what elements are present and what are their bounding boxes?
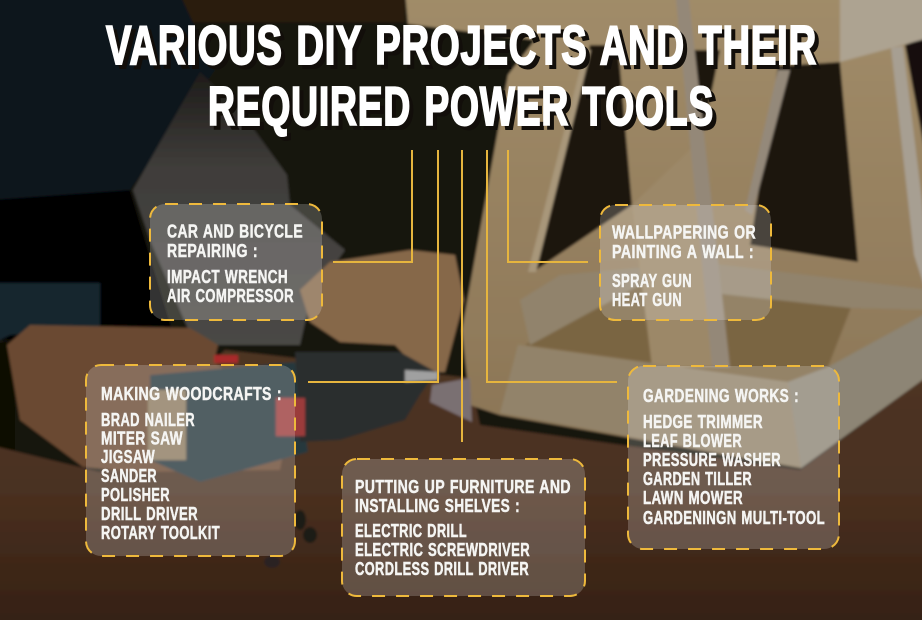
title (106, 14, 817, 137)
panel: making woodcrafts: DRILL DRIVER (101, 504, 198, 524)
panel: car and bicycle repairing: IMPACT WRENCH (167, 267, 288, 287)
panel: car and bicycle repairing: REPAIRING : (167, 241, 258, 261)
panel: making woodcrafts: JIGSAW (101, 447, 155, 467)
panel: making woodcrafts (86, 365, 295, 556)
connector: wallpapering or painting (508, 150, 588, 262)
panel: gardening works: GARDENING WORKS : (643, 386, 799, 406)
panel: making woodcrafts: ROTARY TOOLKIT (101, 523, 220, 543)
connector: car and bicycle repairing (333, 150, 412, 262)
connector: gardening works (487, 150, 617, 382)
panel: putting up furniture and installing shelves (342, 459, 585, 596)
connector: making woodcrafts (308, 150, 438, 382)
connector: putting up furniture (461, 150, 463, 442)
panel: making woodcrafts: SANDER (101, 466, 157, 486)
panel: gardening works: LAWN MOWER (643, 488, 743, 508)
panel: gardening works (628, 366, 839, 549)
panel: making woodcrafts: POLISHER (101, 485, 170, 505)
panel: gardening works: GARDENINGN MULTI-TOOL (643, 508, 825, 528)
panel: gardening works: LEAF BLOWER (643, 431, 742, 451)
connector lines (308, 150, 617, 442)
panel: gardening works: PRESSURE WASHER (643, 450, 781, 470)
panel: putting up furniture and installing shelves: PUTTING UP FURNITURE AND (355, 477, 571, 497)
panel: putting up furniture and installing shelves: CORDLESS DRILL DRIVER (355, 559, 529, 579)
panel: gardening works: HEDGE TRIMMER (643, 412, 763, 432)
panel: wallpapering or painting a wall: WALLPAPERING OR (612, 222, 756, 242)
panel: putting up furniture and installing shelves: INSTALLING SHELVES : (355, 496, 520, 516)
panel: wallpapering or painting a wall: SPRAY GUN (612, 271, 692, 291)
panel: putting up furniture and installing shelves: ELECTRIC SCREWDRIVER (355, 540, 530, 560)
panel: making woodcrafts: BRAD NAILER (101, 410, 195, 430)
panel: wallpapering or painting a wall: HEAT GUN (612, 290, 682, 310)
panel: wallpapering or painting a wall (600, 205, 771, 320)
panel: making woodcrafts: MAKING WOODCRAFTS : (101, 384, 282, 404)
panel: gardening works: GARDEN TILLER (643, 469, 752, 489)
panel: putting up furniture and installing shelves: ELECTRIC DRILL (355, 521, 467, 541)
panel: car and bicycle repairing: CAR AND BICYCLE (167, 222, 303, 242)
panel: wallpapering or painting a wall: PAINTING A WALL : (612, 242, 754, 262)
panel: car and bicycle repairing: AIR COMPRESSOR (167, 286, 294, 306)
panel: car and bicycle repairing (150, 204, 322, 320)
panel: making woodcrafts: MITER SAW (101, 428, 183, 448)
